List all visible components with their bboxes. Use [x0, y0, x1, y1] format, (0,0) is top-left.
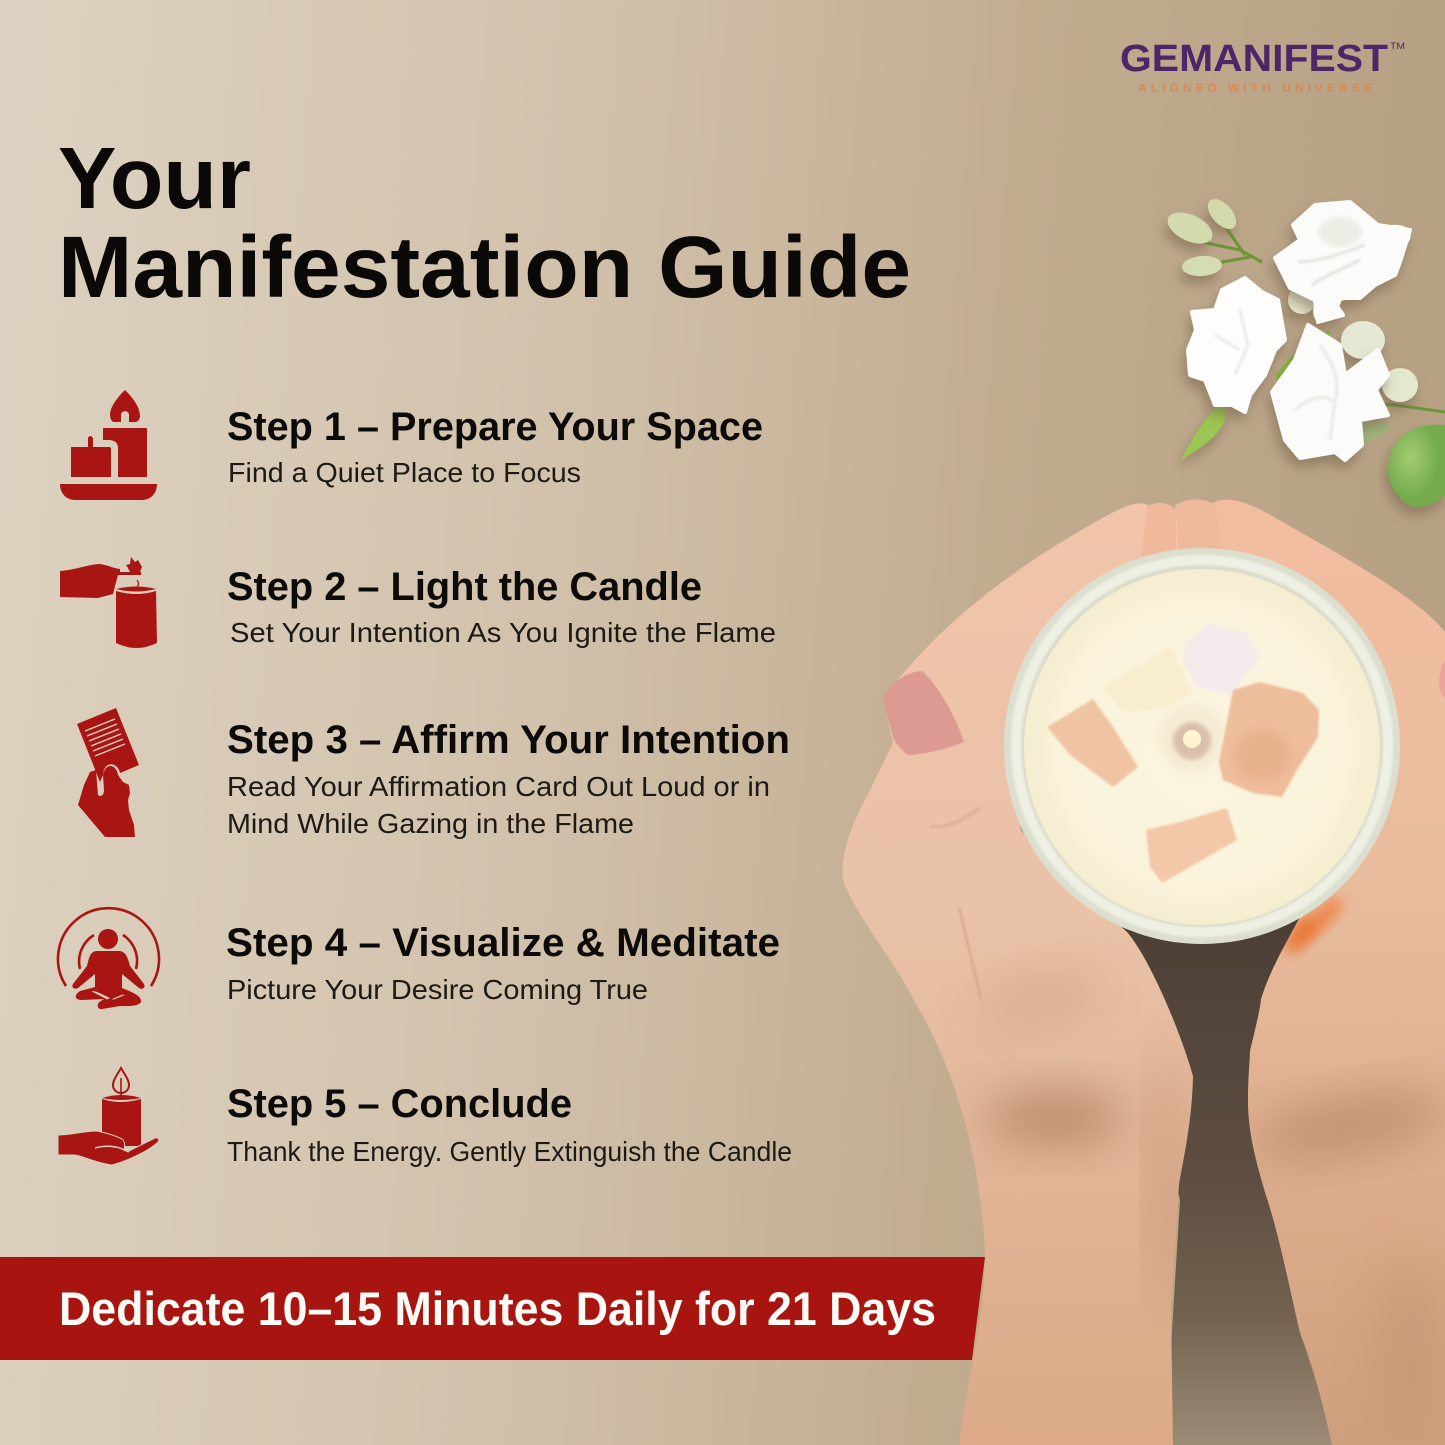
icon: candle on open hand	[58, 1068, 159, 1165]
icon: meditating figure	[58, 908, 159, 1009]
step 3 text: Mind While Gazing in the Flame	[227, 808, 634, 839]
step 4 text	[226, 921, 780, 1005]
left hand	[830, 480, 1200, 1445]
crystal stones	[1047, 623, 1319, 883]
banner: Dedicate 10–15 Minutes Daily for 21 Days	[59, 1282, 936, 1335]
step 1 text: Find a Quiet Place to Focus	[228, 457, 581, 488]
title: Your	[58, 130, 251, 227]
step 2 text: Step 2 – Light the Candle	[227, 565, 702, 609]
right hand nail	[1439, 660, 1445, 698]
wick glow	[1158, 704, 1226, 772]
leaves	[1181, 403, 1226, 460]
fingertip right	[1172, 499, 1225, 570]
step 3 text	[227, 718, 790, 839]
fingertip left	[1140, 503, 1176, 570]
title: Manifestation Guide	[58, 219, 911, 316]
shadow gap between hands	[1110, 915, 1340, 1445]
step 2 text	[227, 565, 776, 648]
step 2 text: Set Your Intention As You Ignite the Flame	[230, 617, 776, 648]
logo: ALIGNED WITH UNIVERSE	[1138, 81, 1372, 95]
step 1	[60, 390, 763, 500]
step 4 text: Step 4 – Visualize & Meditate	[226, 921, 780, 965]
banner	[0, 1257, 985, 1360]
step 5	[58, 1068, 792, 1167]
flower bottom	[1272, 325, 1388, 460]
stems	[1192, 225, 1445, 412]
buds	[1163, 194, 1418, 402]
step 1 text	[227, 405, 763, 488]
step 3 text: Step 3 – Affirm Your Intention	[227, 718, 790, 762]
logo	[1120, 38, 1405, 95]
fingernail	[883, 671, 964, 755]
step 5 text: Thank the Energy. Gently Extinguish the Candle	[227, 1136, 792, 1167]
icon: hand holding card	[77, 708, 139, 837]
step 4 text: Picture Your Desire Coming True	[227, 974, 648, 1005]
step 3 text: Read Your Affirmation Card Out Loud or in	[227, 771, 770, 802]
step 5 text	[227, 1082, 792, 1167]
step 3	[77, 708, 790, 839]
photo: hands holding candle	[830, 480, 1445, 1445]
logo: TM	[1390, 41, 1405, 51]
candle	[1004, 548, 1400, 944]
title	[58, 130, 911, 316]
jasmine flowers	[1163, 194, 1445, 507]
step 4	[58, 908, 780, 1009]
icon: hand lighting candle	[60, 557, 157, 648]
flower top	[1275, 202, 1416, 327]
logo: GEMANIFEST	[1120, 38, 1388, 80]
step 2	[60, 557, 776, 648]
step 5 text: Step 5 – Conclude	[227, 1082, 572, 1126]
right hand	[1212, 500, 1445, 1445]
flower left	[1188, 278, 1285, 412]
icon: candles on tray	[60, 390, 157, 500]
step 1 text: Step 1 – Prepare Your Space	[227, 405, 763, 449]
